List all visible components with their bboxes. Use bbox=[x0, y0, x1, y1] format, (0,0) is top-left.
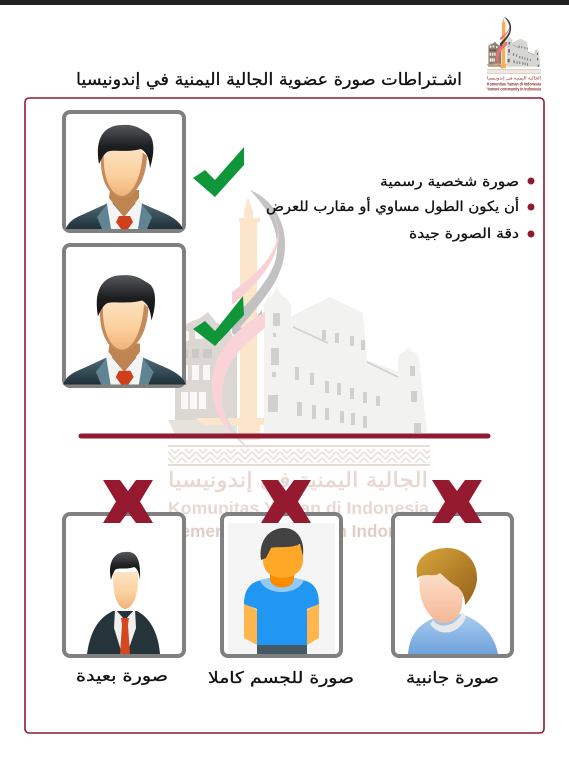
figure shirt bbox=[244, 580, 319, 645]
figure trousers bbox=[257, 645, 307, 654]
logo English name: Yemeni community in Indonesia bbox=[487, 86, 541, 92]
main frame bbox=[25, 98, 544, 733]
requirement 1: صورة شخصية رسمية bbox=[380, 174, 519, 190]
caption: side photo: صورة جانبية bbox=[406, 668, 499, 688]
rejected mark 3 bbox=[432, 480, 482, 523]
rejected mark 1 bbox=[103, 480, 153, 523]
photo box: accepted portrait 2 bbox=[63, 245, 186, 386]
photo box: accepted portrait 1 bbox=[64, 112, 184, 231]
rejected mark 2 bbox=[261, 480, 311, 523]
logo bbox=[487, 17, 542, 92]
logo Arabic name: الجالية اليمنية في إندونيسيا bbox=[487, 76, 541, 82]
divider line bbox=[81, 434, 488, 438]
caption: full body photo: صورة للجسم كاملا bbox=[208, 668, 354, 688]
logo Indonesian name: Komunitas Yaman di Indonesia bbox=[487, 82, 542, 86]
requirements list bbox=[266, 174, 534, 242]
watermark Arabic name: الجالية اليمنية في إندونيسيا bbox=[168, 468, 428, 493]
photo box: far away portrait bbox=[64, 514, 184, 656]
top bar bbox=[0, 0, 569, 5]
bullet 3 bbox=[528, 230, 534, 238]
watermark English name: Yemeni community in Indonesia bbox=[170, 521, 432, 541]
caption: far away photo: صورة بعيدة bbox=[76, 666, 168, 686]
bullet 1 bbox=[528, 178, 534, 184]
figure arms bbox=[244, 603, 319, 645]
check mark 2 bbox=[193, 296, 244, 346]
check mark 1 bbox=[193, 147, 244, 197]
photo box: full body figure bbox=[222, 514, 341, 656]
requirement 3: دقة الصورة جيدة bbox=[409, 226, 519, 242]
figure hair bbox=[261, 528, 303, 560]
requirement 2: أن يكون الطول مساوي أو مقارب للعرض bbox=[266, 197, 519, 215]
watermark Indonesian name: Komunitas Yaman di Indonesia bbox=[168, 498, 429, 518]
figure head bbox=[263, 545, 303, 578]
photo box: side view portrait bbox=[393, 514, 512, 656]
bullet 2 bbox=[528, 204, 534, 210]
figure neck bbox=[270, 565, 294, 588]
title: اشـتراطات صورة عضوية الجالية اليمنية في إندونيسيا bbox=[76, 70, 462, 90]
background watermark emblem bbox=[168, 190, 432, 541]
